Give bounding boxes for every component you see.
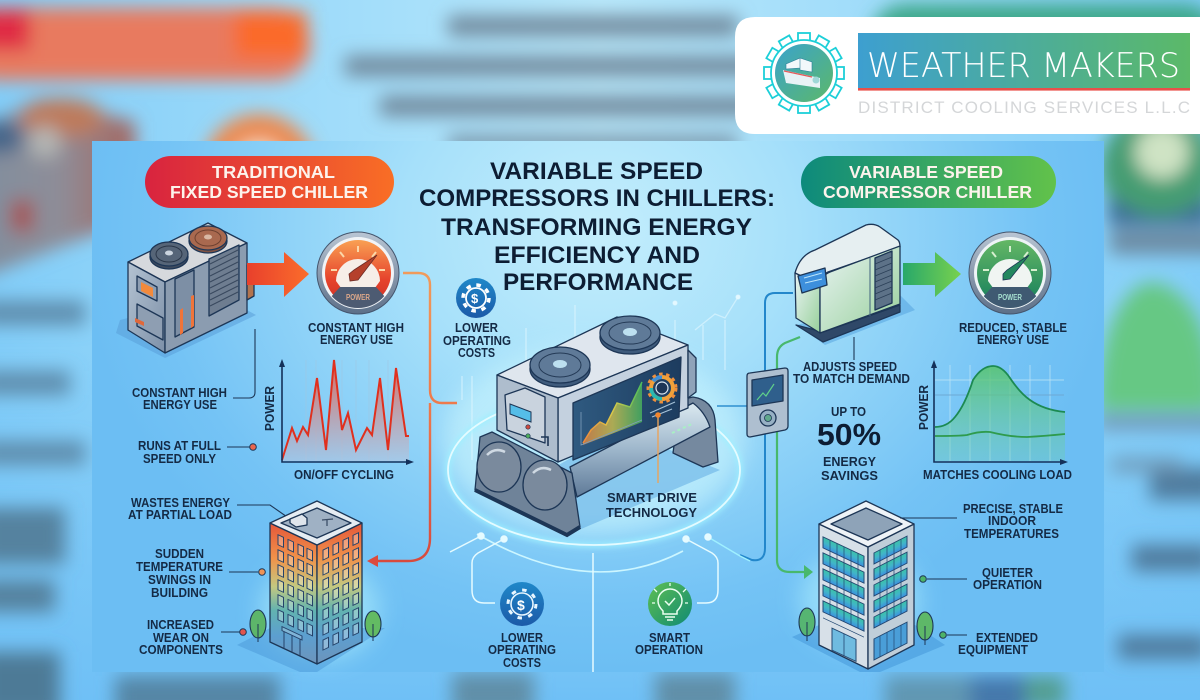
title: TRANSFORMING ENERGY <box>441 214 752 241</box>
callout: extended equipment: EQUIPMENT <box>958 643 1028 657</box>
glow behind buildings and centre <box>260 345 920 660</box>
title <box>419 158 775 296</box>
icon and label: smart operation <box>635 582 703 657</box>
icon and label: lower operating costs (bottom): $ <box>517 597 525 613</box>
icon: remote controller <box>747 368 788 437</box>
icon: fixed speed chiller unit <box>116 223 256 358</box>
building: temperature swings <box>237 501 385 672</box>
icon and label: lower operating costs (bottom): LOWER <box>501 631 543 645</box>
gear on screen <box>648 374 676 402</box>
callout: wastes energy at partial load <box>128 496 290 522</box>
callout: increased wear: COMPONENTS <box>139 643 223 657</box>
callout: runs at full speed only: RUNS AT FULL <box>138 439 221 453</box>
callout: quieter operation: QUIETER <box>982 566 1033 580</box>
label: constant high energy use <box>308 321 404 347</box>
bottom connectors with nodes <box>450 533 750 672</box>
heading pill: traditional: TRADITIONAL <box>212 162 335 182</box>
callout: smart drive technology <box>606 412 698 520</box>
icon and label: lower operating costs (bottom): COSTS <box>503 656 541 670</box>
callout: temperature swings: TEMPERATURE <box>136 560 223 574</box>
label: constant high energy use: CONSTANT HIGH <box>308 321 404 335</box>
title: COMPRESSORS IN CHILLERS: <box>419 185 775 212</box>
callout: wastes energy at partial load: WASTES ENERGY <box>131 496 231 510</box>
right connectors: blue and green <box>717 293 813 579</box>
panel: traditional fixed speed chiller <box>116 156 414 672</box>
callout: temperature swings <box>136 547 265 600</box>
logo card <box>735 17 1200 134</box>
stat: up to 50% energy savings: 50% <box>817 417 881 452</box>
label: reduced stable energy use: ENERGY USE <box>977 333 1049 347</box>
heading pill: traditional <box>145 156 394 208</box>
chart: power matches cooling load: POWER <box>917 385 931 430</box>
gauge: high power: POWER <box>346 293 370 302</box>
title: PERFORMANCE <box>503 269 693 296</box>
gauge: high power <box>317 232 399 314</box>
callout: extended equipment <box>940 631 1038 657</box>
callout: extended equipment: EXTENDED <box>976 631 1038 645</box>
callout: constant high energy use: CONSTANT HIGH <box>132 386 227 400</box>
gauge: reduced power <box>969 232 1051 314</box>
title: EFFICIENCY AND <box>494 242 700 269</box>
building: stable temperatures <box>792 501 945 672</box>
central platform rings <box>448 395 740 572</box>
icon: variable speed chiller unit <box>795 224 915 345</box>
icon and label: lower operating costs (bottom) <box>488 582 556 670</box>
label: constant high energy use: ENERGY USE <box>320 333 393 347</box>
callout: constant high energy use <box>132 329 255 412</box>
callout: precise stable temperatures: PRECISE, STABLE <box>963 502 1063 516</box>
drive screen <box>573 357 681 460</box>
icon and label: lower operating costs (top): OPERATING <box>443 334 511 348</box>
icon and label: lower operating costs (top) <box>443 278 511 360</box>
left connector: gauge to bracket to building <box>367 273 457 567</box>
logo gear icon <box>764 33 844 113</box>
condenser tube <box>570 403 710 497</box>
callout: temperature swings: SUDDEN <box>155 547 204 561</box>
icon and label: smart operation: SMART <box>649 631 690 645</box>
callout: increased wear: INCREASED <box>147 618 214 632</box>
logo subtitle: DISTRICT COOLING SERVICES L.L.C <box>858 98 1190 117</box>
callout: wastes energy at partial load: AT PARTIAL LOAD <box>128 508 232 522</box>
chart: on/off cycling power: POWER <box>263 386 277 431</box>
callout: adjusts speed: ADJUSTS SPEED <box>803 360 897 374</box>
callout: smart drive technology: SMART DRIVE <box>607 491 697 505</box>
infographic panel background <box>92 141 1104 672</box>
callout: temperature swings: SWINGS IN <box>148 573 211 587</box>
stat: up to 50% energy savings: SAVINGS <box>821 469 878 483</box>
arrow: chiller to green gauge <box>903 252 961 297</box>
logo banner <box>858 33 1190 91</box>
chart: power matches cooling load: MATCHES COOLING LOAD <box>923 468 1072 482</box>
callout: precise stable temperatures: INDOOR <box>988 514 1036 528</box>
callout: temperature swings: BUILDING <box>151 586 208 600</box>
icon and label: lower operating costs (top): COSTS <box>458 346 495 360</box>
stat: up to 50% energy savings: ENERGY <box>823 455 877 469</box>
callout: smart drive technology: TECHNOLOGY <box>606 506 698 520</box>
faint energy lines behind central chiller <box>462 295 740 460</box>
stat: up to 50% energy savings: UP TO <box>831 405 866 419</box>
icon and label: lower operating costs (bottom): OPERATING <box>488 643 556 657</box>
stat: up to 50% energy savings <box>817 405 881 483</box>
front end plate and domes <box>475 432 580 535</box>
icon and label: lower operating costs (top): LOWER <box>455 321 498 335</box>
callout: precise stable temperatures: TEMPERATURES <box>964 527 1059 541</box>
title: VARIABLE SPEED <box>490 158 703 185</box>
heading pill: variable speed <box>801 156 1056 208</box>
chiller body <box>497 317 688 398</box>
gauge: reduced power: POWER <box>998 293 1022 302</box>
callout: adjusts speed <box>793 337 910 386</box>
logo banner: WEATHER MAKERS <box>867 46 1180 86</box>
callout: increased wear: WEAR ON <box>153 631 209 645</box>
callout: quieter operation: OPERATION <box>973 578 1042 592</box>
heading pill: variable speed: COMPRESSOR CHILLER <box>823 182 1032 202</box>
right end plate <box>673 397 718 467</box>
heading pill: traditional: FIXED SPEED CHILLER <box>170 182 368 202</box>
callout: adjusts speed: TO MATCH DEMAND <box>793 372 910 386</box>
control box <box>505 388 548 446</box>
icon and label: smart operation: OPERATION <box>635 643 703 657</box>
arrow: chiller to gauge <box>247 252 309 297</box>
label: reduced stable energy use: REDUCED, STABLE <box>959 321 1067 335</box>
callout: increased wear <box>139 618 246 657</box>
chart: power matches cooling load <box>917 360 1072 482</box>
label: reduced stable energy use <box>959 321 1067 347</box>
central variable speed chiller <box>475 316 720 535</box>
chart: on/off cycling power: ON/OFF CYCLING <box>294 468 394 482</box>
callout: runs at full speed only: SPEED ONLY <box>143 452 217 466</box>
callout: quieter operation <box>920 566 1042 592</box>
callout: precise stable temperatures <box>900 502 1063 541</box>
chart: on/off cycling power <box>263 359 414 482</box>
panel: variable speed compressor chiller <box>747 156 1072 672</box>
fans <box>530 351 590 387</box>
callout: runs at full speed only <box>138 439 256 466</box>
icon and label: lower operating costs (top): $ <box>471 291 479 306</box>
callout: constant high energy use: ENERGY USE <box>143 398 217 412</box>
heading pill: variable speed: VARIABLE SPEED <box>849 162 1003 182</box>
